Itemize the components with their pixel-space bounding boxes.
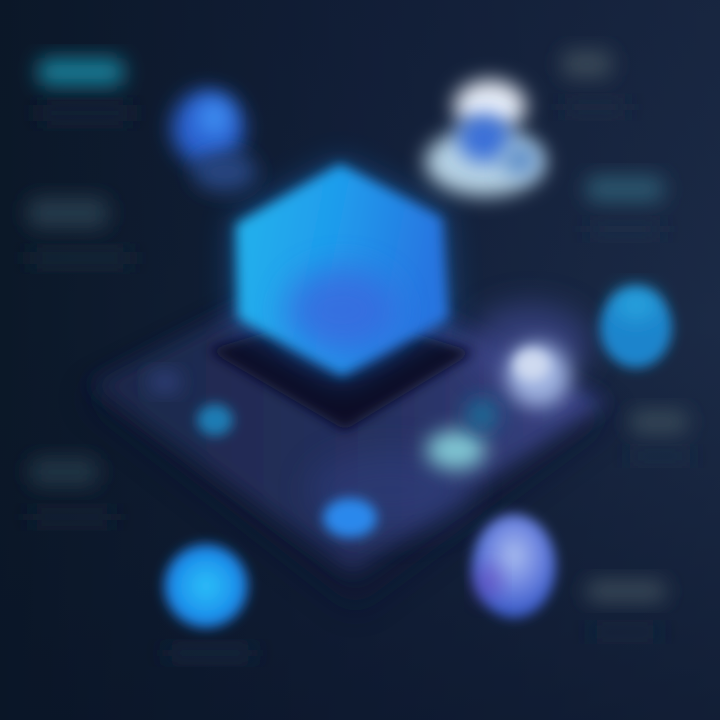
icon: purple orb lower right: [472, 514, 556, 618]
label: bottom right: [586, 580, 666, 638]
icon: platform nodes: [149, 372, 498, 538]
icon: blue shape upper left: [172, 90, 257, 192]
icon: cyan orb lower left: [164, 544, 248, 628]
label: lower right: [630, 410, 690, 462]
label: middle left: [28, 198, 130, 266]
label: lower left: [30, 458, 114, 524]
dark block beneath hexagon: [208, 310, 474, 430]
icon: blue circle right: [600, 288, 672, 368]
label: top left: [38, 58, 130, 122]
isometric platform: [85, 262, 612, 608]
icon: white and blue shape upper right: [425, 80, 545, 196]
central hexagon: [232, 160, 452, 382]
label: bottom centre left: [165, 646, 255, 660]
label: top right: [562, 50, 625, 114]
label: upper right: [586, 176, 664, 236]
icon: white glow on platform: [506, 343, 570, 407]
